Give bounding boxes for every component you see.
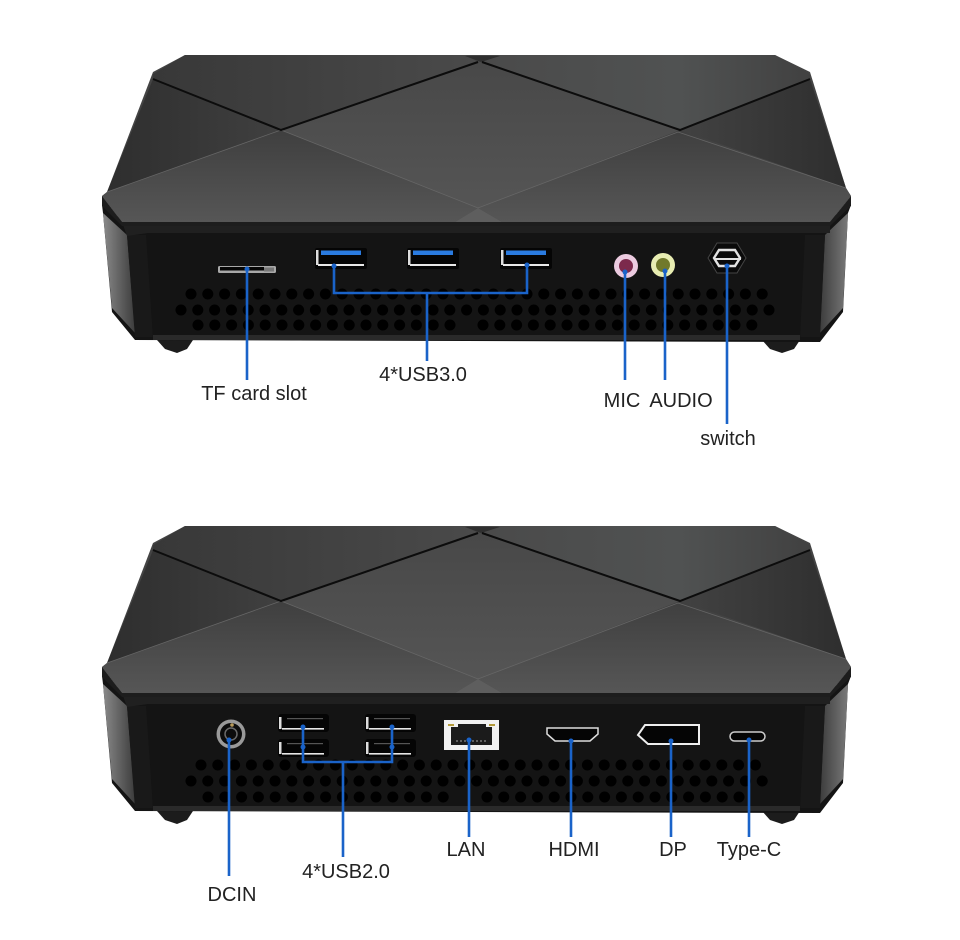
icon: DisplayPort <box>638 725 699 744</box>
icon: HDMI port <box>547 728 598 741</box>
icon: USB 2.0 port bottom right <box>365 739 416 757</box>
callout: DC line <box>226 738 232 876</box>
device body rear <box>102 526 851 824</box>
label: LAN: LAN <box>447 839 485 861</box>
vent holes <box>181 294 771 325</box>
label: DCIN: DCIN <box>208 884 256 906</box>
vent holes <box>191 765 765 797</box>
icon: AUDIO jack <box>651 253 675 277</box>
callout: switch line <box>724 264 730 424</box>
icon: USB 3.0 port 2 <box>407 248 459 269</box>
panel: rear view of mini PC <box>102 526 851 906</box>
icon: LAN port <box>444 720 499 750</box>
callout: HDMI line <box>568 738 574 837</box>
label: AUDIO: AUDIO <box>649 390 713 412</box>
label: 4*USB3.0: 4*USB3.0 <box>379 364 467 386</box>
callout: DP line <box>668 738 674 837</box>
icon: USB 3.0 port 1 <box>315 248 367 269</box>
panel: front view of mini PC <box>102 55 851 450</box>
icon: USB 3.0 port 3 <box>500 248 552 269</box>
icon: power switch <box>708 243 746 273</box>
label: Type-C: Type-C <box>717 839 781 861</box>
label: HDMI: HDMI <box>548 839 600 861</box>
icon: TF card slot <box>218 266 276 273</box>
icon: USB 2.0 port bottom left <box>278 739 329 757</box>
callout: MIC line <box>622 270 628 380</box>
label: 4*USB2.0: 4*USB2.0 <box>302 861 390 883</box>
callout: AUDIO line <box>662 268 668 380</box>
device body top <box>102 55 851 353</box>
label: DP: DP <box>659 839 687 861</box>
icon: DC jack <box>216 720 246 748</box>
icon: USB 2.0 port top left <box>278 714 329 732</box>
callout: LAN line <box>466 738 472 837</box>
label: switch: switch <box>700 428 756 450</box>
callout: Type-C line <box>746 738 752 837</box>
callout: TF card slot line <box>244 266 250 380</box>
icon: USB 2.0 port top right <box>365 714 416 732</box>
callout: USB 2.0 bracket <box>300 724 394 857</box>
icon: MIC jack <box>614 254 638 278</box>
label: MIC: MIC <box>604 390 640 412</box>
callout: USB 3.0 bracket <box>332 262 530 361</box>
label: TF card slot: TF card slot <box>201 383 307 405</box>
icon: Type-C port <box>730 732 765 741</box>
